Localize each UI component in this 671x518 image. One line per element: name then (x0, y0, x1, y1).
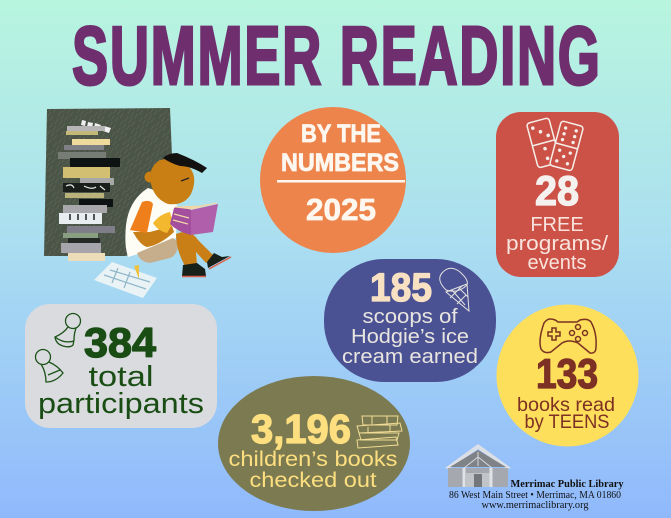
panel: by the numbers circle: NUMBERS (281, 149, 399, 177)
panel: children's books: children’s books (228, 448, 398, 471)
panel: ice cream scoops: cream earned (342, 346, 478, 368)
panel: teen books: by TEENS (524, 411, 610, 433)
icon: game controller (540, 319, 596, 353)
panel: dark textured backdrop (44, 108, 173, 256)
panel: teen books: 133 (536, 350, 598, 397)
footer: library logo and address: 86 West Main Street • Merrimac, MA 01860 (449, 490, 621, 501)
boy (125, 153, 231, 276)
panel: by the numbers circle: 2025 (306, 192, 376, 227)
panel: ice cream scoops: 185 (370, 266, 432, 310)
panel: free programs: 28 (535, 167, 579, 214)
footer: library logo and address (445, 444, 624, 511)
footer: library logo and address: Merrimac Public Library (510, 479, 624, 490)
panel: free programs: FREE (530, 214, 584, 236)
panel: free programs: programs/ (506, 233, 609, 255)
panel: by the numbers circle (260, 107, 406, 253)
panel: children's books (218, 376, 410, 511)
panel: ice cream scoops (324, 259, 496, 382)
illustration: boy reading beside stacked papers (44, 108, 231, 298)
icon: game pawns (36, 314, 80, 382)
icon: library building (445, 444, 511, 487)
panel: total participants: 384 (84, 319, 157, 366)
panel: total participants: total (88, 361, 154, 393)
icon: dominoes (526, 118, 584, 171)
panel: ice cream scoops: Hodgie’s ice (351, 326, 469, 348)
worksheet and pencil (94, 262, 157, 298)
icon: ice cream cone (440, 268, 469, 311)
panel: teen books (496, 304, 638, 446)
panel: total participants (25, 304, 217, 428)
panel: free programs: events (528, 252, 586, 274)
panel: ice cream scoops: scoops of (362, 306, 458, 328)
footer: library logo and address: www.merrimaclibrary.org (482, 500, 588, 511)
panel: children's books: checked out (250, 469, 377, 492)
panel: teen books: books read (517, 394, 615, 416)
panel: children's books: 3,196 (251, 406, 351, 452)
title: SUMMER READING (72, 9, 600, 102)
panel: free programs (496, 112, 619, 277)
stacked paper strips (58, 120, 120, 261)
panel: total participants: participants (38, 388, 204, 420)
icon: stack of books (357, 416, 402, 448)
panel: by the numbers circle: BY THE (301, 120, 381, 148)
